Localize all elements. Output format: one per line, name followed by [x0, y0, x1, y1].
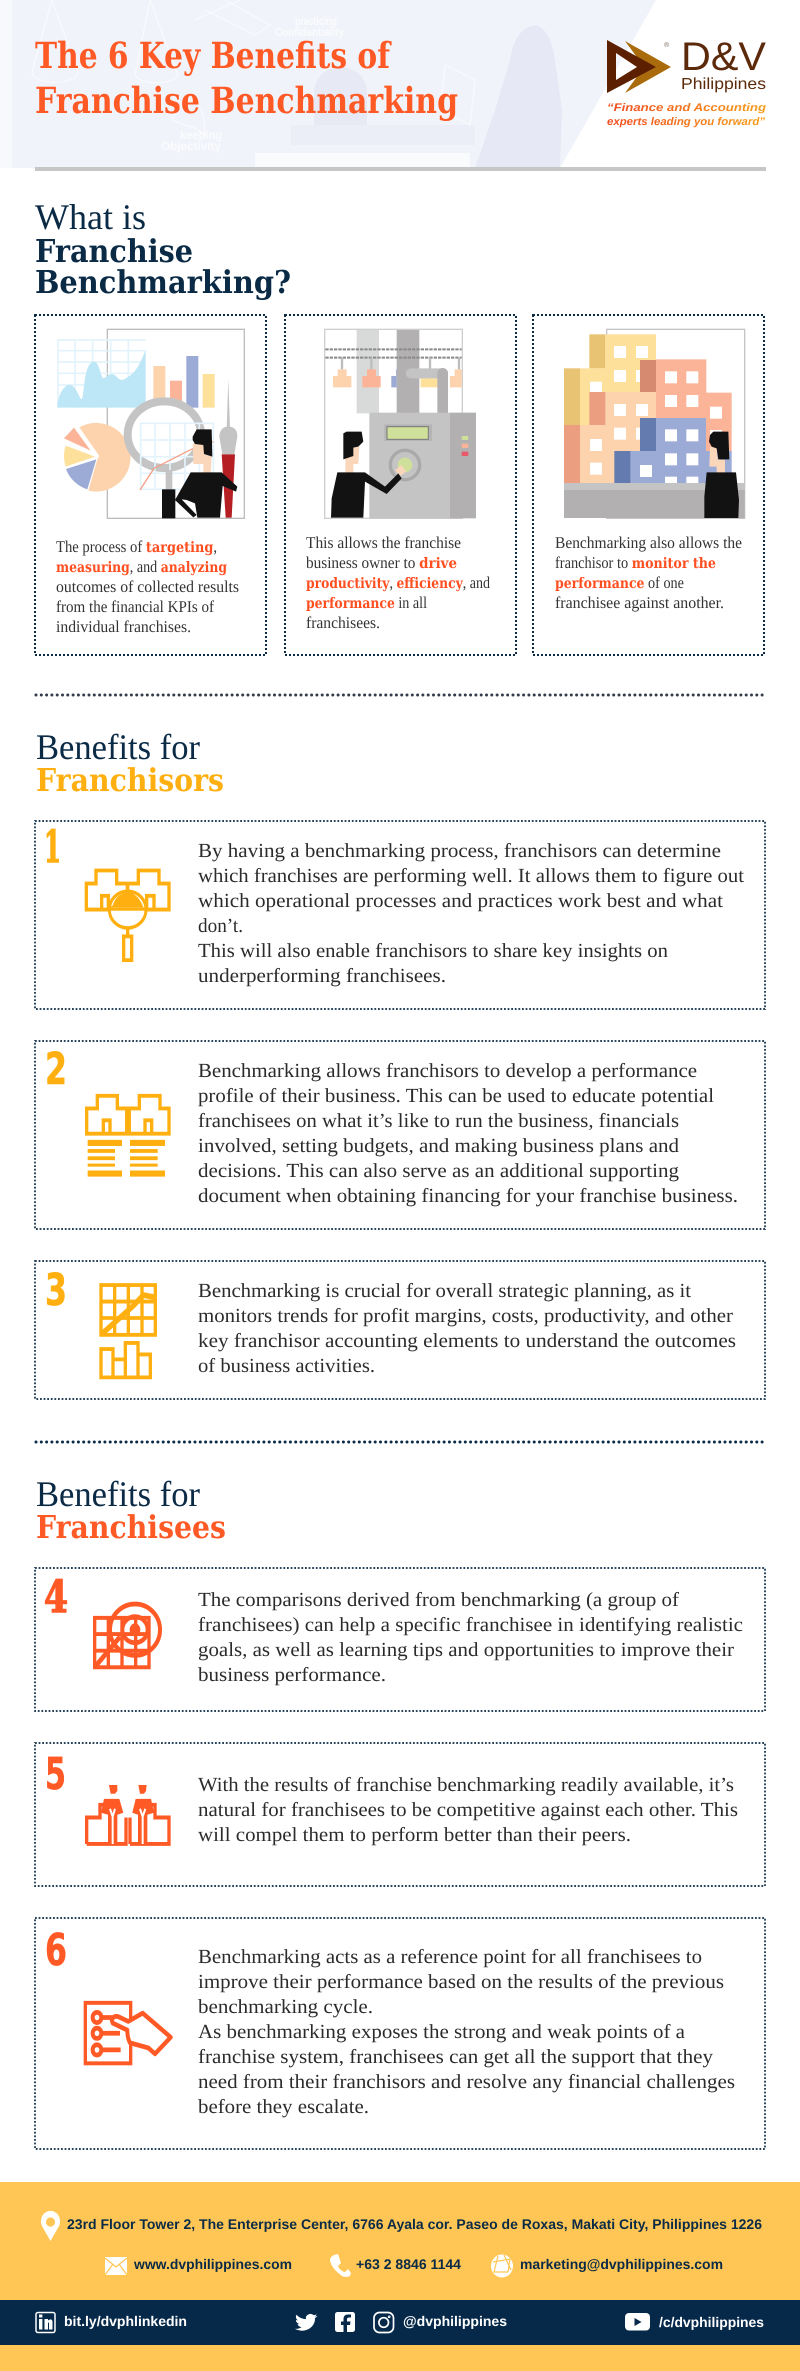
benefit 3 text: Benchmarking is crucial for overall strategic planning, as it	[198, 1280, 691, 1302]
definition text 2: performance in all	[306, 593, 427, 612]
heading: what is franchise benchmarking: Franchise	[35, 233, 193, 270]
icon: Instagram	[374, 2312, 394, 2332]
benefit 5 text	[198, 1774, 738, 1846]
benefit 5 text: With the results of franchise benchmarking readily available, it’s	[198, 1774, 734, 1796]
benefit 2 text: involved, setting budgets, and making business plans and	[198, 1135, 679, 1157]
icon: hand on checklist	[85, 2003, 171, 2063]
icon: YouTube	[625, 2313, 650, 2330]
footer: social band	[0, 2300, 800, 2345]
heading: benefits for franchisors	[36, 727, 224, 799]
icon: competing franchisees on podiums	[87, 1785, 169, 1844]
benefit 2 text: franchisees on what it’s like to run the business, financials	[198, 1110, 679, 1132]
number 6: 6	[45, 1925, 67, 1976]
logo: D&V Philippines: ®	[664, 42, 670, 49]
panel: benefit 6	[35, 1918, 765, 2149]
definition text 2: This allows the franchise	[306, 533, 461, 552]
benefit 3 text: monitors trends for profit margins, costs, productivity, and other	[198, 1305, 733, 1327]
panel: benefit 2	[35, 1041, 765, 1229]
definition text 2: franchisees.	[306, 613, 380, 632]
benefit 4 text: franchisees) can help a specific franchisee in identifying realistic	[198, 1614, 743, 1636]
number 4: 4	[44, 1572, 68, 1623]
logo: D&V Philippines: “Finance and Accounting	[607, 102, 766, 114]
benefit 6 text: before they escalate.	[198, 2096, 369, 2118]
benefit 1 text: which operational processes and practices work best and what	[198, 890, 723, 912]
benefit 6 text: franchise system, franchisees can get all the support that they	[198, 2046, 713, 2068]
logo: D&V Philippines: experts leading you forward”	[607, 116, 766, 128]
header background photo: practicing	[295, 14, 337, 28]
heading: benefits for franchisees: Benefits for	[36, 1474, 200, 1514]
icon: Facebook	[335, 2312, 355, 2332]
benefit 4 text: goals, as well as learning tips and opportunities to improve their	[198, 1639, 734, 1661]
panel: definition card 1	[35, 315, 266, 655]
benefit 3 text: of business activities.	[198, 1355, 375, 1377]
header background photo: Objectivity	[161, 139, 221, 153]
benefit 1 text: By having a benchmarking process, franchisors can determine	[198, 840, 721, 862]
benefit 4 text	[198, 1589, 743, 1686]
header background photo: Confidentiality	[275, 25, 344, 39]
panel: benefit 4	[35, 1568, 765, 1711]
icon: trend grid and bar chart	[101, 1285, 155, 1377]
definition text 3	[555, 533, 742, 612]
header background photo: keeping	[180, 128, 222, 142]
icon: LinkedIn	[36, 2312, 55, 2332]
header background photo	[0, 0, 656, 168]
benefit 3 text	[198, 1280, 736, 1377]
email: marketing@dvphilippines.com	[520, 2256, 723, 2272]
website: www.dvphilippines.com	[133, 2256, 292, 2272]
illustration: buildings and observer	[564, 329, 745, 518]
definition text 1: The process of targeting,	[56, 537, 217, 556]
address: 23rd Floor Tower 2, The Enterprise Center, 6766 Ayala cor. Paseo de Roxas, Makati City, Philippines 1226	[67, 2216, 762, 2232]
panel: benefit 5	[35, 1743, 765, 1886]
definition text 3: Benchmarking also allows the	[555, 533, 742, 552]
definition text 3: performance of one	[555, 573, 684, 592]
definition text 1: outcomes of collected results	[56, 577, 239, 596]
logo: D&V Philippines	[607, 35, 766, 128]
benefit 1 text: don’t.	[198, 915, 243, 937]
title: Franchise Benchmarking	[35, 80, 458, 122]
benefit 6 text: benchmarking cycle.	[198, 1996, 373, 2018]
benefit 5 text: will compel them to perform better than their peers.	[198, 1824, 631, 1846]
benefit 1 text	[198, 840, 744, 987]
panel: benefit 1	[35, 821, 765, 1009]
benefit 6 text	[198, 1946, 735, 2118]
benefit 1 text: underperforming franchisees.	[198, 965, 446, 987]
title: The 6 Key Benefits of	[35, 35, 392, 77]
benefit 2 text: decisions. This can also serve as an additional supporting	[198, 1160, 679, 1182]
LinkedIn link: bit.ly/dvphlinkedin	[64, 2313, 187, 2329]
number 5: 5	[45, 1749, 66, 1800]
illustration: charts and magnifier	[57, 329, 244, 518]
icon: location pin	[41, 2211, 60, 2241]
YouTube channel: /c/dvphilippines	[659, 2314, 764, 2330]
heading: what is franchise benchmarking: What is	[35, 197, 146, 237]
definition text 3: franchisor to monitor the	[555, 553, 716, 572]
heading: benefits for franchisees: Franchisees	[36, 1509, 226, 1546]
benefit 6 text: need from their franchisors and resolve any financial challenges	[198, 2071, 735, 2093]
panel: definition card 3	[533, 315, 764, 655]
benefit 2 text: profile of their business. This can be used to educate potential	[198, 1085, 714, 1107]
footer: contact band	[0, 2182, 800, 2371]
icon: globe	[491, 2254, 513, 2278]
benefit 3 text: key franchisor accounting elements to understand the outcomes	[198, 1330, 736, 1352]
icon: Twitter	[295, 2314, 317, 2331]
icon: franchises under magnifier	[86, 870, 169, 960]
definition text 1	[56, 537, 239, 636]
logo: D&V Philippines: D&V	[681, 35, 766, 79]
benefit 1 text: This will also enable franchisors to share key insights on	[198, 940, 668, 962]
definition text 2: business owner to drive	[306, 553, 457, 572]
definition text 1: from the financial KPIs of	[56, 597, 214, 616]
heading: benefits for franchisors: Benefits for	[36, 727, 200, 767]
icon: phone	[330, 2254, 351, 2277]
heading: benefits for franchisors: Franchisors	[36, 762, 224, 799]
phone number: +63 2 8846 1144	[356, 2256, 461, 2272]
icon: envelope	[105, 2257, 127, 2275]
benefit 4 text: business performance.	[198, 1664, 386, 1686]
heading: what is franchise benchmarking	[35, 197, 291, 301]
number 2: 2	[45, 1044, 67, 1095]
heading: benefits for franchisees	[36, 1474, 226, 1546]
number 1: 1	[44, 822, 61, 873]
benefit 6 text: improve their performance based on the results of the previous	[198, 1971, 724, 1993]
definition text 1: measuring, and analyzing	[56, 557, 227, 576]
icon: grid and target	[95, 1604, 160, 1667]
icon: franchise profiles	[87, 1096, 169, 1177]
benefit 4 text: The comparisons derived from benchmarking (a group of	[198, 1589, 679, 1611]
logo: D&V Philippines: Philippines	[681, 76, 766, 93]
benefit 2 text: document when obtaining financing for your franchise business.	[198, 1185, 738, 1207]
benefit 2 text: Benchmarking allows franchisors to develop a performance	[198, 1060, 697, 1082]
benefit 6 text: Benchmarking acts as a reference point for all franchisees to	[198, 1946, 702, 1968]
heading: what is franchise benchmarking: Benchmarking?	[35, 264, 291, 301]
definition text 3: franchisee against another.	[555, 593, 724, 612]
title	[35, 35, 458, 122]
definition text 1: individual franchises.	[56, 617, 191, 636]
number 3: 3	[45, 1265, 67, 1316]
panel: definition card 2	[285, 315, 516, 655]
Instagram handle: @dvphilippines	[403, 2313, 507, 2329]
benefit 5 text: natural for franchisees to be competitive against each other. This	[198, 1799, 738, 1821]
benefit 6 text: As benchmarking exposes the strong and weak points of a	[198, 2021, 685, 2043]
definition text 2	[306, 533, 491, 632]
illustration: control machine	[325, 329, 476, 518]
benefit 1 text: which franchises are performing well. It allows them to figure out	[198, 865, 744, 887]
definition text 2: productivity, efficiency, and	[306, 573, 491, 592]
benefit 2 text	[198, 1060, 738, 1207]
panel: benefit 3	[35, 1261, 765, 1399]
